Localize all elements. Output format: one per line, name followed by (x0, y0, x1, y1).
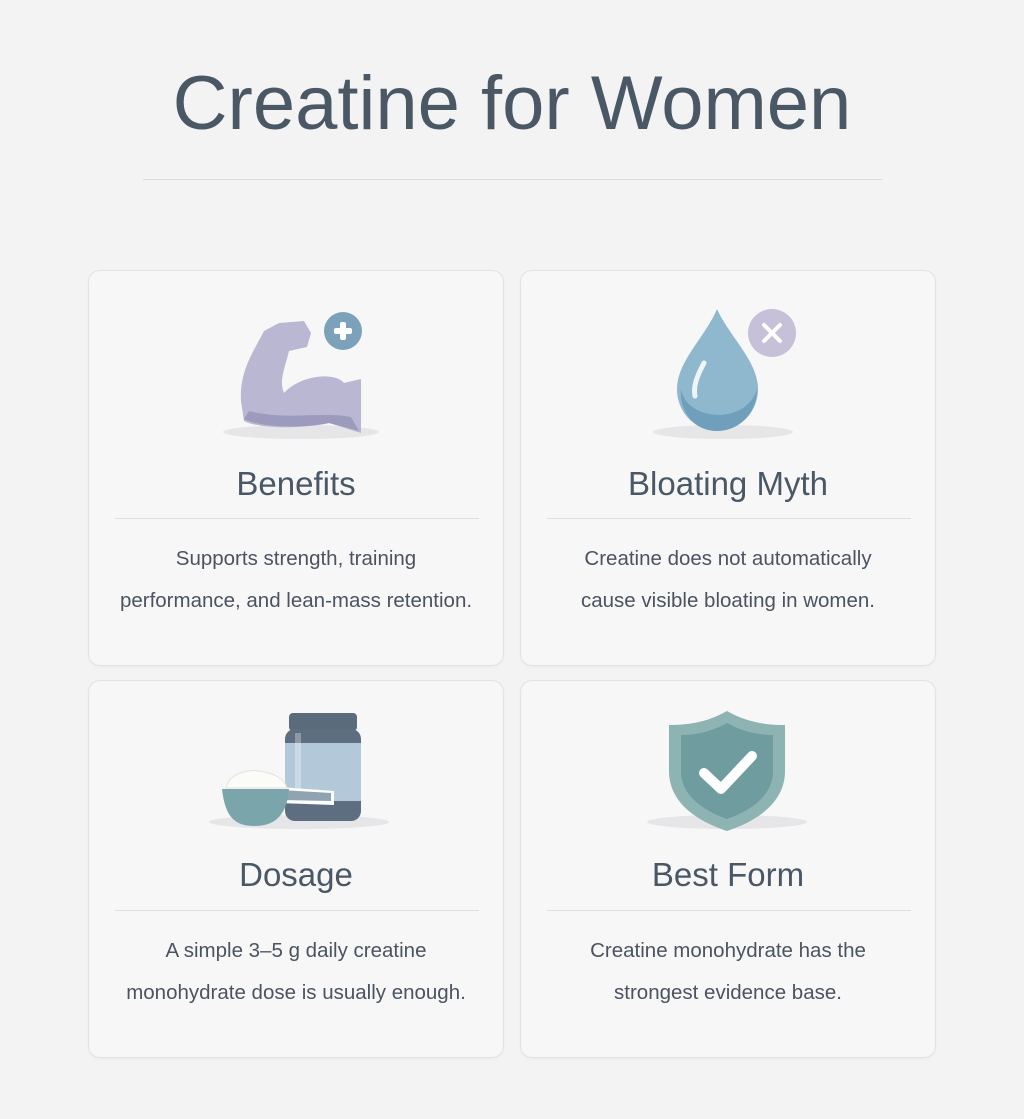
icon: jar and scoop (209, 713, 389, 829)
panel: dosage (88, 680, 504, 1058)
icon: shield with check (647, 711, 807, 831)
panel: best form (520, 680, 936, 1058)
body text: monohydrate dose is usually enough. (126, 981, 466, 1004)
body text (126, 939, 466, 1004)
title: Creatine for Women (173, 61, 851, 146)
body text: cause visible bloating in women. (581, 589, 875, 612)
icon: flexed arm with plus (223, 312, 379, 439)
heading: Bloating Myth (628, 465, 828, 502)
body text (120, 547, 472, 612)
heading: Best Form (652, 856, 804, 893)
body text: performance, and lean-mass retention. (120, 589, 472, 612)
body text (581, 547, 875, 612)
heading: Benefits (236, 465, 356, 502)
heading: Dosage (239, 856, 353, 893)
icon: water drop with x (653, 309, 796, 439)
body text: A simple 3–5 g daily creatine (166, 939, 426, 962)
body text: Creatine does not automatically (584, 547, 872, 570)
panel: bloating myth (520, 270, 936, 666)
body text (590, 939, 866, 1004)
panel: benefits (88, 270, 504, 666)
body text: Supports strength, training (176, 547, 416, 570)
body text: strongest evidence base. (614, 981, 842, 1004)
body text: Creatine monohydrate has the (590, 939, 866, 962)
